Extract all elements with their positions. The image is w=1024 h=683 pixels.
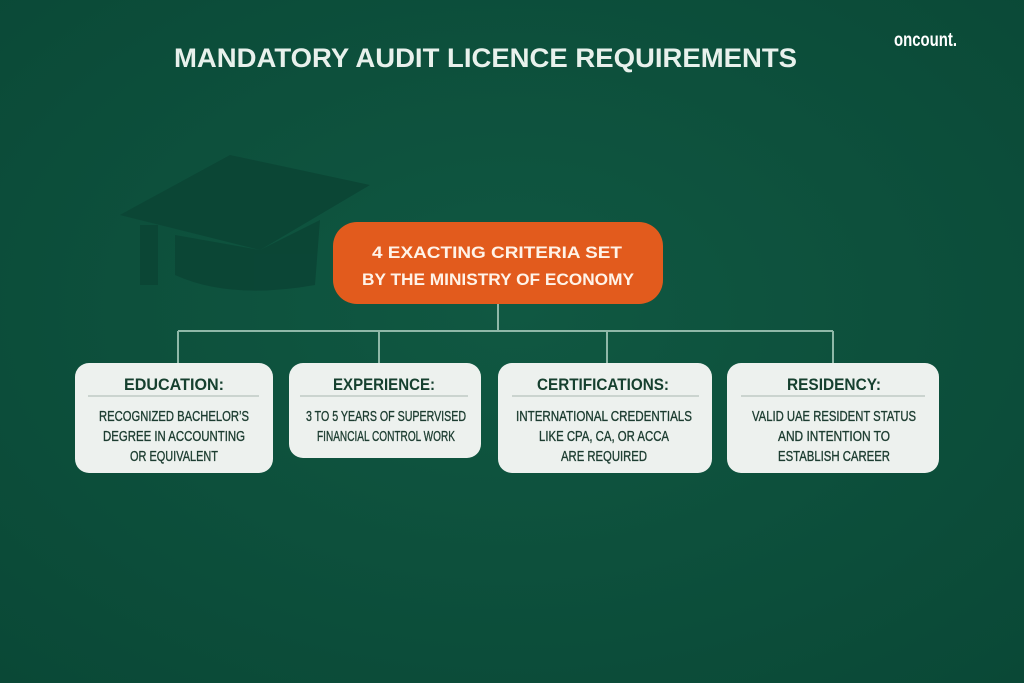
panel: residency: RESIDENCY: [787, 375, 881, 394]
panel: certifications: ARE REQUIRED [561, 449, 647, 465]
panel: certifications: LIKE CPA, CA, OR ACCA [539, 429, 669, 445]
panel: residency: AND INTENTION TO [778, 429, 890, 445]
panel: residency: ESTABLISH CAREER [778, 449, 890, 465]
panel: education: OR EQUIVALENT [130, 449, 218, 465]
callout: 4 exacting criteria [333, 222, 663, 304]
panel: certifications [498, 363, 712, 473]
panel: certifications: CERTIFICATIONS: [537, 375, 669, 394]
title: MANDATORY AUDIT LICENCE REQUIREMENTS [174, 43, 797, 73]
panel: residency: VALID UAE RESIDENT STATUS [752, 409, 916, 425]
panel: experience: EXPERIENCE: [333, 375, 435, 394]
callout: 4 exacting criteria: 4 EXACTING CRITERIA SET [372, 243, 623, 262]
panel: education [75, 363, 273, 473]
logo: oncount. [894, 30, 957, 51]
panel: experience: FINANCIAL CONTROL WORK [317, 429, 455, 445]
connector lines [178, 304, 833, 363]
panel: education: EDUCATION: [124, 375, 224, 394]
icon: graduation cap [120, 155, 370, 291]
callout: 4 exacting criteria: BY THE MINISTRY OF ECONOMY [362, 270, 635, 289]
panel: education: RECOGNIZED BACHELOR’S [99, 409, 249, 425]
panel: residency [727, 363, 939, 473]
panel: certifications: INTERNATIONAL CREDENTIALS [516, 409, 692, 425]
panel: education: DEGREE IN ACCOUNTING [103, 429, 245, 445]
panel: experience [289, 363, 481, 458]
panel: experience: 3 TO 5 YEARS OF SUPERVISED [306, 409, 466, 425]
